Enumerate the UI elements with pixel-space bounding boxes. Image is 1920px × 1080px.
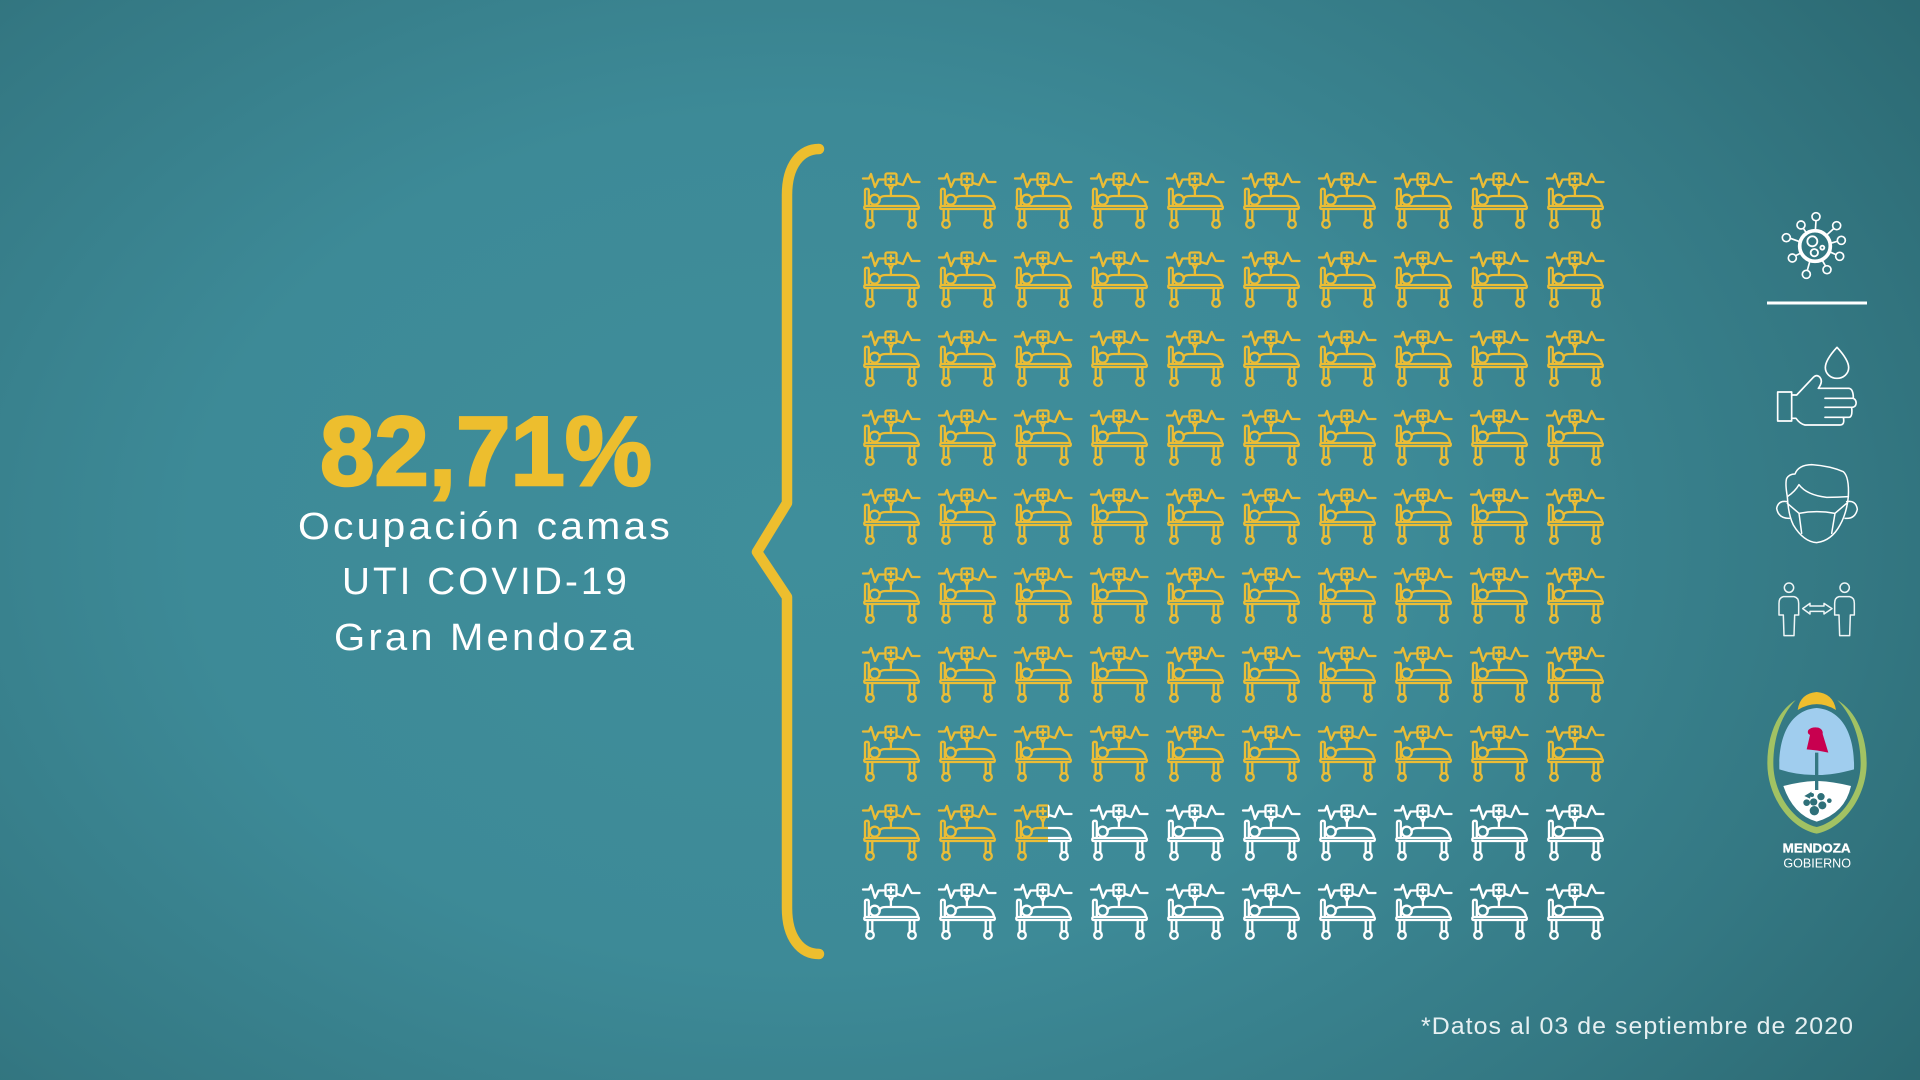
- icon: occupied bed: [1471, 726, 1528, 781]
- icon: occupied bed: [1167, 252, 1224, 307]
- icon: occupied bed: [1319, 568, 1376, 623]
- icon: occupied bed: [1395, 726, 1452, 781]
- bed row 5: [863, 490, 1604, 544]
- icon: occupied bed: [939, 648, 996, 702]
- icon: occupied bed: [1319, 490, 1376, 544]
- icon: occupied bed: [939, 252, 996, 307]
- icon: occupied bed: [1243, 490, 1300, 544]
- logo: Mendoza Gobierno: [1767, 692, 1867, 870]
- icon: occupied bed: [1319, 726, 1376, 781]
- icon: occupied bed: [1015, 648, 1072, 702]
- icon: occupied bed: [1243, 174, 1300, 228]
- icon: free bed: [1395, 806, 1452, 860]
- icon: occupied bed: [1091, 490, 1148, 544]
- icon: occupied bed: [1091, 648, 1148, 702]
- icon: occupied bed: [939, 410, 996, 465]
- icon: occupied bed: [1547, 726, 1604, 781]
- icon: occupied bed: [1395, 490, 1452, 544]
- icon: free bed: [1091, 884, 1148, 939]
- icon: free bed: [939, 884, 996, 939]
- big number: 82,71%: [320, 396, 652, 506]
- logo text: MENDOZA: [1783, 840, 1851, 855]
- bed row 3: [863, 332, 1604, 386]
- icon: occupied bed: [939, 332, 996, 386]
- icon: occupied bed: [1547, 332, 1604, 386]
- icon: occupied bed: [1471, 252, 1528, 307]
- icon: occupied bed: [1091, 726, 1148, 781]
- icon: occupied bed: [1319, 648, 1376, 702]
- icon: occupied bed: [939, 490, 996, 544]
- icon: occupied bed: [1015, 174, 1072, 228]
- icon: occupied bed: [1471, 490, 1528, 544]
- icon: occupied bed: [1395, 332, 1452, 386]
- logo: Mendoza Gobierno: GOBIERNO: [1783, 855, 1851, 870]
- icon: occupied bed: [939, 726, 996, 781]
- icon: occupied bed: [1015, 568, 1072, 623]
- icon: occupied bed: [1167, 726, 1224, 781]
- icon: occupied bed: [1319, 332, 1376, 386]
- icon: occupied bed: [1091, 332, 1148, 386]
- headline: percentage and description: [298, 396, 673, 659]
- icon: occupied bed: [1167, 332, 1224, 386]
- icon: occupied bed: [1243, 252, 1300, 307]
- icon: occupied bed: [1395, 174, 1452, 228]
- icon: occupied bed: [1471, 410, 1528, 465]
- icon: occupied bed: [1091, 174, 1148, 228]
- label line 3: Gran Mendoza: [334, 617, 637, 659]
- icon: occupied bed: [1243, 726, 1300, 781]
- label line 2: UTI COVID-19: [342, 561, 630, 603]
- icon: free bed: [1471, 884, 1528, 939]
- icon: occupied bed: [863, 490, 920, 544]
- icon: occupied bed: [1471, 332, 1528, 386]
- divider line: [1767, 302, 1867, 304]
- icon: free bed: [1471, 806, 1528, 860]
- icon: occupied bed: [1471, 174, 1528, 228]
- logo sky: [1779, 708, 1854, 775]
- icon: occupied bed: [1319, 252, 1376, 307]
- curly brace: [757, 149, 819, 954]
- bed row 7: [863, 648, 1604, 702]
- icon: occupied bed: [863, 174, 920, 228]
- icon: hand washing: [1778, 347, 1856, 425]
- icon: occupied bed: [1395, 648, 1452, 702]
- icon: occupied bed: [1471, 648, 1528, 702]
- icon: partly occupied bed: [1015, 806, 1072, 860]
- icon: free bed: [1319, 806, 1376, 860]
- icon: free bed: [1547, 806, 1604, 860]
- icon: free bed: [1091, 806, 1148, 860]
- icon: occupied bed: [863, 806, 920, 860]
- icon: occupied bed: [1243, 568, 1300, 623]
- icon: free bed: [863, 884, 920, 939]
- icon: occupied bed: [863, 648, 920, 702]
- bed row 10: free: [863, 884, 1604, 939]
- icon: free bed: [1243, 884, 1300, 939]
- icon: occupied bed: [1091, 252, 1148, 307]
- footnote: *Datos al 03 de septiembre de 2020: [1421, 1013, 1854, 1040]
- icon: occupied bed: [1015, 410, 1072, 465]
- icon: occupied bed: [1167, 648, 1224, 702]
- icon: occupied bed: [939, 568, 996, 623]
- icon: free bed: [1243, 806, 1300, 860]
- icon: free bed: [1547, 884, 1604, 939]
- icon: occupied bed: [1091, 568, 1148, 623]
- icon: occupied bed: [1015, 726, 1072, 781]
- icon: occupied bed: [1547, 410, 1604, 465]
- icon: social distancing: [1779, 583, 1854, 636]
- icon: occupied bed: [1547, 174, 1604, 228]
- icon: occupied bed: [863, 726, 920, 781]
- icon: occupied bed: [1167, 174, 1224, 228]
- icon: occupied bed: [939, 174, 996, 228]
- icon: occupied bed: [1319, 174, 1376, 228]
- logo field: [1783, 781, 1851, 822]
- icon: occupied bed: [1547, 648, 1604, 702]
- logo cap: [1807, 727, 1828, 753]
- logo wreath: [1767, 700, 1867, 834]
- bed row 6: [863, 568, 1604, 623]
- icon: free bed: [1395, 884, 1452, 939]
- icon: occupied bed: [1167, 490, 1224, 544]
- bed row 9: partly occupied: [863, 806, 1604, 860]
- bed row 4: [863, 410, 1604, 465]
- icon: free bed: [1167, 884, 1224, 939]
- icon: occupied bed: [1395, 410, 1452, 465]
- bed row 2: [863, 252, 1604, 307]
- icon: free bed: [1167, 806, 1224, 860]
- pictogram chart: 100 ICU beds: [863, 174, 1604, 939]
- icon: occupied bed: [1243, 410, 1300, 465]
- label line 1: Ocupación camas: [298, 506, 673, 548]
- bed row 1: [863, 174, 1604, 228]
- icon: occupied bed: [1243, 332, 1300, 386]
- icon: occupied bed: [939, 806, 996, 860]
- icon: face mask: [1777, 465, 1857, 543]
- icon: occupied bed: [1471, 568, 1528, 623]
- icon: occupied bed: [1167, 410, 1224, 465]
- icon: occupied bed: [1395, 252, 1452, 307]
- logo sun: [1798, 692, 1836, 710]
- icon: occupied bed: [863, 410, 920, 465]
- icon: occupied bed: [863, 332, 920, 386]
- logo grapes: [1803, 792, 1832, 815]
- icon: occupied bed: [1547, 568, 1604, 623]
- icon: occupied bed: [1015, 332, 1072, 386]
- icon: occupied bed: [1319, 410, 1376, 465]
- icon: occupied bed: [863, 568, 920, 623]
- icon: occupied bed: [1091, 410, 1148, 465]
- icon: occupied bed: [1015, 252, 1072, 307]
- icon: occupied bed: [863, 252, 920, 307]
- bed row 8: [863, 726, 1604, 781]
- icon: occupied bed: [1547, 490, 1604, 544]
- icon: virus: [1782, 213, 1845, 278]
- icon: occupied bed: [1167, 568, 1224, 623]
- icon: free bed: [1015, 884, 1072, 939]
- icon: occupied bed: [1547, 252, 1604, 307]
- icon: free bed: [1319, 884, 1376, 939]
- icon: occupied bed: [1015, 490, 1072, 544]
- icon: occupied bed: [1395, 568, 1452, 623]
- icon: occupied bed: [1243, 648, 1300, 702]
